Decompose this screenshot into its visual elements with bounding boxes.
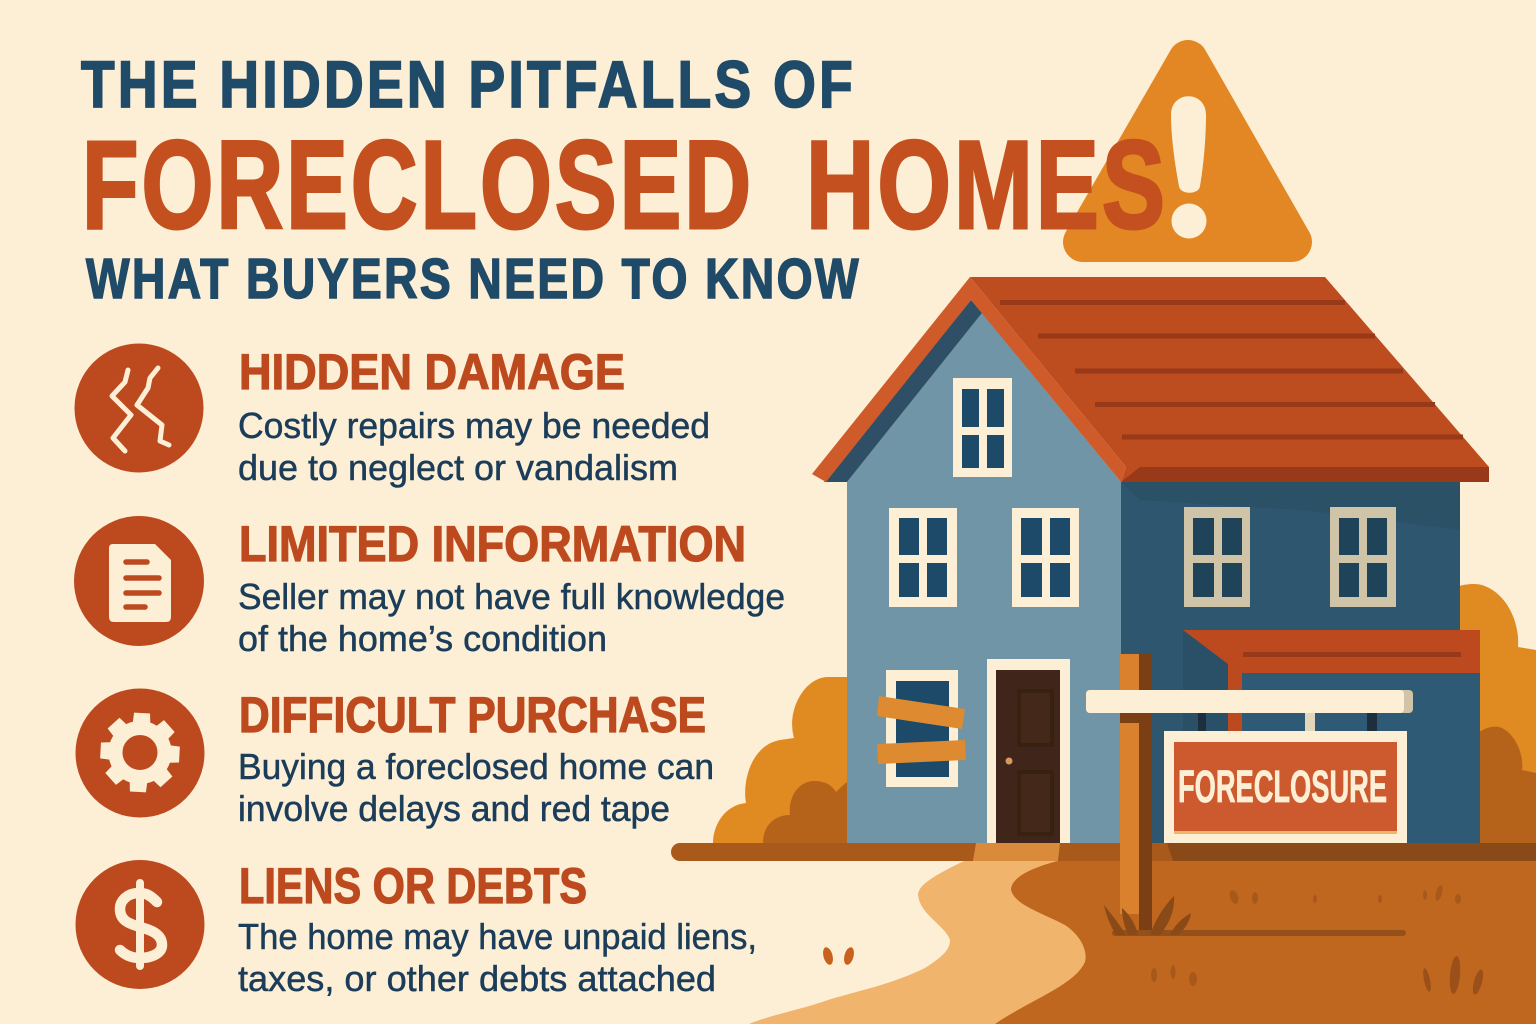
heading: LIMITED INFORMATION	[239, 516, 746, 572]
left bushes	[713, 677, 850, 843]
front path	[749, 861, 1200, 1024]
description	[238, 916, 757, 999]
gable shadow	[824, 300, 982, 482]
item: liens or debts	[76, 858, 757, 999]
title line 2: HOMES	[806, 116, 1168, 255]
wall: dark side	[1121, 482, 1460, 843]
description: The home may have unpaid liens,	[238, 916, 757, 957]
description: Seller may not have full knowledge	[238, 576, 785, 617]
item: hidden damage	[74, 344, 710, 488]
house	[812, 277, 1489, 861]
boarded-up window	[877, 670, 966, 787]
icon: wall cracks	[74, 344, 204, 472]
description: due to neglect or vandalism	[238, 447, 678, 488]
hangers	[1198, 713, 1377, 732]
doorstep	[973, 843, 1060, 861]
heading: LIENS OR DEBTS	[239, 858, 587, 914]
roof	[812, 277, 1489, 482]
cross bar	[1086, 690, 1413, 713]
description	[238, 576, 785, 659]
grass at post base	[1104, 896, 1191, 935]
title	[81, 47, 1168, 311]
wall: light gable side	[847, 313, 1121, 843]
foreclosure sign	[1086, 654, 1413, 936]
window: attic	[953, 378, 1012, 477]
title line 2: FORECLOSED	[82, 116, 754, 255]
door	[987, 659, 1070, 843]
title line 1: THE HIDDEN PITFALLS OF	[81, 47, 856, 121]
item: difficult purchase	[76, 687, 714, 829]
heading: DIFFICULT PURCHASE	[239, 687, 706, 743]
description: Costly repairs may be needed	[238, 405, 710, 446]
porch	[1183, 630, 1480, 843]
description: taxes, or other debts attached	[238, 958, 716, 999]
description: Buying a foreclosed home can	[238, 746, 714, 787]
window: middle	[1012, 508, 1079, 607]
window: dark side right	[1330, 507, 1396, 607]
icon: document	[74, 516, 204, 646]
sign board	[1164, 731, 1407, 843]
sign board: FORECLOSURE	[1178, 761, 1387, 812]
icon: dollar sign	[76, 860, 204, 989]
icon: gear	[76, 688, 204, 818]
right bushes	[1455, 584, 1536, 843]
window: left	[889, 508, 957, 607]
description	[238, 405, 710, 488]
icon: warning triangle	[1083, 60, 1292, 242]
lawn	[995, 861, 1536, 1024]
description: involve delays and red tape	[238, 788, 670, 829]
ground strip	[671, 843, 1536, 861]
description: of the home’s condition	[238, 618, 607, 659]
lawn grass tufts	[1151, 884, 1485, 996]
small sprout	[821, 946, 856, 966]
title line 3: WHAT BUYERS NEED TO KNOW	[86, 247, 861, 311]
heading: HIDDEN DAMAGE	[239, 344, 625, 400]
item: limited information	[74, 516, 785, 659]
sign post	[1112, 654, 1406, 936]
description	[238, 746, 714, 829]
window: dark side left	[1184, 507, 1250, 607]
